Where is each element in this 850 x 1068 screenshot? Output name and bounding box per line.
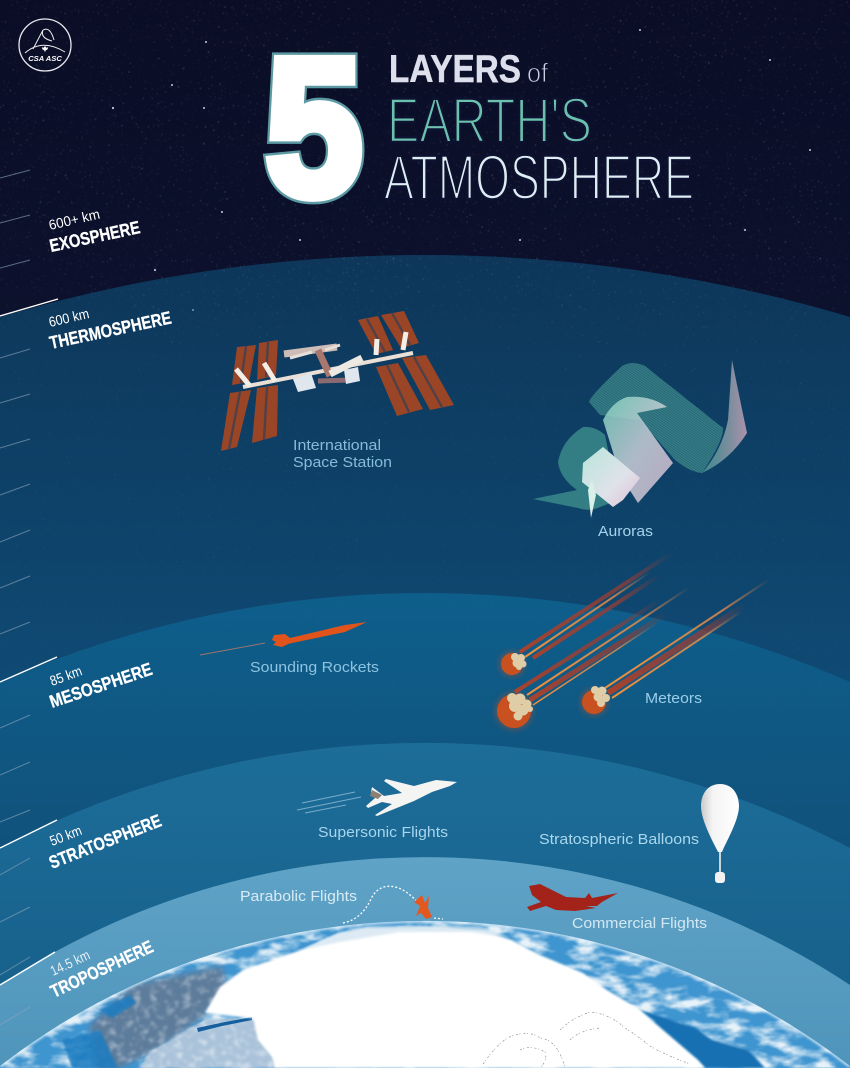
label: troposphere: TROPOSPHERE (47, 937, 156, 1002)
label: exosphere: EXOSPHERE (48, 217, 142, 256)
text: international space station: International (293, 438, 381, 454)
layer: thermosphere band (0, 255, 850, 1068)
text: meteors: Meteors (645, 691, 702, 707)
title: earth's: EARTH'S (387, 86, 592, 156)
label: mesosphere: MESOSPHERE (47, 659, 155, 712)
label: stratosphere: 50 km (47, 822, 84, 849)
meteor 3 (580, 579, 770, 716)
icon: auroras (533, 360, 747, 518)
earth: left grey land (90, 966, 226, 1068)
logo: CSA ASC: CSA ASC (28, 54, 62, 63)
title: layers of: of (527, 58, 548, 88)
label: stratosphere: STRATOSPHERE (46, 810, 164, 873)
earth: icy haze at top edge (301, 926, 511, 950)
earth (0, 920, 850, 1068)
title (266, 19, 694, 237)
label: exosphere: 600+ km (47, 206, 101, 233)
text: auroras: Auroras (598, 524, 653, 540)
icon: commercial plane (527, 884, 618, 911)
text: parabolic flights: Parabolic Flights (240, 889, 357, 905)
aurora: lower coil (533, 427, 618, 510)
earth: land mottling (90, 968, 225, 1068)
icon: stratospheric balloon (701, 784, 739, 883)
aurora: right tip (702, 360, 747, 473)
aurora: inner fold (582, 447, 640, 507)
text: commercial flights: Commercial Flights (572, 916, 707, 932)
label: mesosphere: 85 km (48, 662, 84, 689)
icon: sounding rocket (200, 622, 367, 655)
starfield (0, 0, 850, 686)
earth: left sea (62, 995, 136, 1068)
earth: clouds (0, 920, 850, 1068)
earth: rocky coast (483, 1012, 690, 1068)
aurora: tail (588, 480, 596, 518)
title: atmosphere: ATMOSPHERE (384, 143, 694, 213)
title: layers of: LAYERS (389, 48, 521, 91)
aurora: front ribbon (603, 397, 673, 503)
earth: pale land mottling (142, 1018, 274, 1068)
earth: right deep sea (637, 1009, 765, 1068)
logo: CSA ASC (19, 19, 71, 71)
label: troposphere: 14.5 km (48, 946, 92, 979)
aurora: back ribbon (589, 363, 723, 473)
earth: lower left pale land (140, 1018, 278, 1068)
meteor 2 (495, 587, 690, 730)
icon: international space station (221, 311, 454, 451)
layer: stratosphere band (0, 743, 850, 1068)
title: numeral 5: 5 (266, 19, 362, 237)
text: supersonic flights: Supersonic Flights (318, 825, 448, 841)
layer: mesosphere band (0, 593, 850, 1068)
earth: atmospheric rim (0, 921, 850, 1066)
speed lines (297, 792, 361, 813)
earth: dark channel (197, 1017, 252, 1032)
text: stratospheric balloons: Stratospheric Balloons (539, 832, 699, 848)
text: sounding rockets: Sounding Rockets (250, 660, 379, 676)
title: numeral 5: 5 (266, 19, 362, 237)
label: thermosphere: 600 km (47, 305, 91, 330)
solar panels (221, 311, 454, 451)
icon: meteors (495, 553, 770, 730)
icon: parabolic flight path (343, 886, 443, 923)
label: troposphere (47, 937, 156, 1002)
text: international space station: Space Station (293, 455, 392, 471)
label: thermosphere: THERMOSPHERE (48, 308, 173, 353)
boundary ticks (0, 299, 58, 985)
earth: ice sheet (205, 927, 705, 1068)
white radiators (236, 332, 406, 386)
habitat modules (284, 345, 362, 381)
layer: troposphere band (0, 857, 850, 1068)
panel centre stripes (229, 313, 442, 449)
text: international space station (293, 438, 392, 471)
central radiators (293, 367, 360, 392)
altitude ticks (0, 170, 30, 1025)
truss (243, 353, 413, 387)
icon: supersonic jet (297, 779, 457, 816)
meteor 1 (499, 553, 672, 677)
